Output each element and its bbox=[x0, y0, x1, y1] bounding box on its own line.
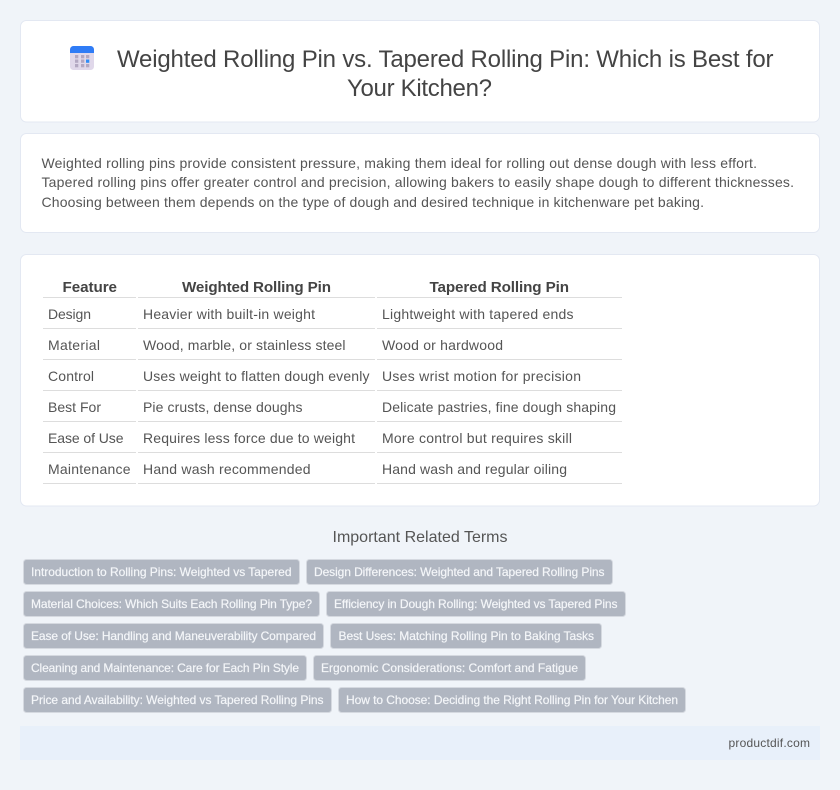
row: ease of use: Requires less force due to weight bbox=[143, 430, 355, 446]
row: best for: Best For bbox=[48, 399, 101, 415]
description text: Tapered rolling pins offer greater control and precision, allowing bakers to easily shape dough to different thicknesses. bbox=[42, 174, 794, 190]
tag: Introduction to Rolling Pins: Weighted vs Tapered bbox=[31, 565, 292, 579]
row: maintenance: Hand wash recommended bbox=[143, 461, 310, 477]
row: ease of use: Ease of Use bbox=[48, 430, 124, 446]
tag bbox=[24, 656, 306, 680]
table header row: Feature bbox=[62, 279, 117, 296]
row: material: Wood, marble, or stainless steel bbox=[143, 337, 346, 353]
tag bbox=[306, 560, 612, 584]
tag bbox=[330, 624, 602, 648]
tag: Ease of Use: Handling and Maneuverability Compared bbox=[31, 629, 316, 643]
table header row bbox=[62, 279, 569, 296]
tag: Efficiency in Dough Rolling: Weighted vs Tapered Pins bbox=[334, 597, 618, 611]
title: Your Kitchen? bbox=[347, 75, 492, 102]
title bbox=[117, 46, 774, 102]
title: Weighted Rolling Pin vs. Tapered Rolling Pin: Which is Best for bbox=[117, 46, 774, 73]
table header row: Weighted Rolling Pin bbox=[182, 279, 331, 296]
row: material: Wood or hardwood bbox=[382, 337, 503, 353]
tag bbox=[338, 688, 686, 712]
description text: Weighted rolling pins provide consistent pressure, making them ideal for rolling out dense dough with less effort. bbox=[42, 155, 757, 171]
row: design bbox=[48, 306, 574, 322]
icon: calendar bbox=[70, 46, 94, 70]
tag: Cleaning and Maintenance: Care for Each Pin Style bbox=[31, 661, 299, 675]
row: control: Control bbox=[48, 368, 94, 384]
panel: comparison table bbox=[20, 254, 820, 506]
panel: header bbox=[20, 20, 820, 122]
row: design: Lightweight with tapered ends bbox=[382, 306, 574, 322]
tag: Ergonomic Considerations: Comfort and Fatigue bbox=[321, 661, 578, 675]
tag bbox=[24, 688, 332, 712]
footer source: productdif.com bbox=[728, 736, 810, 750]
tag bbox=[326, 592, 626, 616]
tag bbox=[24, 560, 300, 584]
row: ease of use: More control but requires skill bbox=[382, 430, 572, 446]
description text bbox=[42, 155, 794, 210]
row: material bbox=[48, 337, 503, 353]
tag: How to Choose: Deciding the Right Rolling Pin for Your Kitchen bbox=[346, 693, 678, 707]
row: maintenance: Hand wash and regular oiling bbox=[382, 461, 567, 477]
tag: Price and Availability: Weighted vs Tapered Rolling Pins bbox=[31, 693, 324, 707]
tag bbox=[24, 624, 324, 648]
row: design: Heavier with built-in weight bbox=[143, 306, 315, 322]
description text: Choosing between them depends on the type of dough and desired technique in kitchenware pet baking. bbox=[42, 194, 704, 210]
tag bbox=[314, 656, 586, 680]
panel: description bbox=[20, 134, 820, 232]
tag: Material Choices: Which Suits Each Rolling Pin Type? bbox=[31, 597, 312, 611]
row: maintenance bbox=[48, 461, 567, 477]
row: control: Uses wrist motion for precision bbox=[382, 368, 581, 384]
row: control: Uses weight to flatten dough evenly bbox=[143, 368, 370, 384]
footer bbox=[20, 726, 820, 760]
row: best for bbox=[48, 399, 616, 415]
row: maintenance: Maintenance bbox=[48, 461, 131, 477]
heading: related terms: Important Related Terms bbox=[332, 529, 508, 546]
related terms tags bbox=[24, 560, 686, 712]
row: ease of use bbox=[48, 430, 572, 446]
row: material: Material bbox=[48, 337, 100, 353]
row: design: Design bbox=[48, 306, 91, 322]
tag: Design Differences: Weighted and Tapered Rolling Pins bbox=[314, 565, 604, 579]
tag bbox=[24, 592, 320, 616]
table header row: Tapered Rolling Pin bbox=[430, 279, 569, 296]
tag: Best Uses: Matching Rolling Pin to Baking Tasks bbox=[338, 629, 594, 643]
row: best for: Delicate pastries, fine dough shaping bbox=[382, 399, 616, 415]
row: control bbox=[48, 368, 581, 384]
row: best for: Pie crusts, dense doughs bbox=[143, 399, 302, 415]
